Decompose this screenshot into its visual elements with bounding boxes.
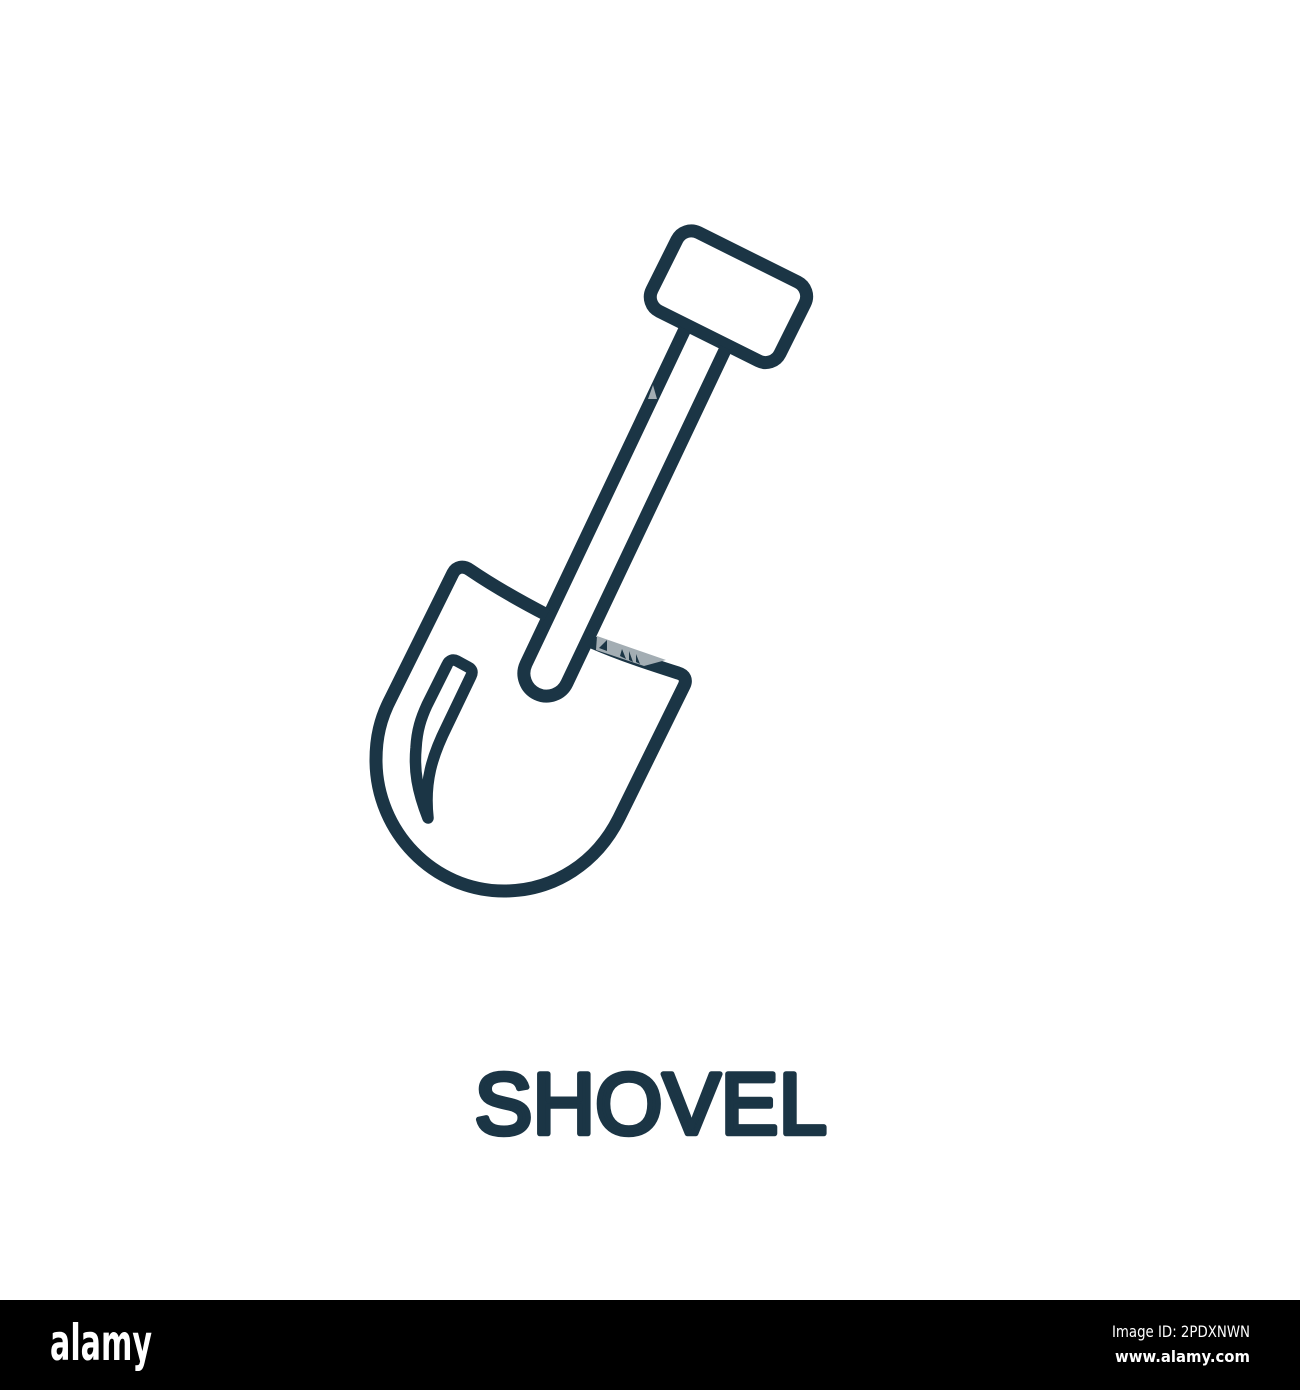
alamy logo: alamy (50, 1314, 152, 1372)
blade highlight (415, 660, 472, 818)
watermark on blade edge (596, 636, 666, 666)
watermark on handle (648, 385, 657, 399)
title: SHOVEL (475, 1056, 827, 1152)
shovel grip (645, 225, 812, 368)
shovel handle (524, 329, 726, 696)
image id: Image ID: 2PDXNWN (1112, 1322, 1250, 1341)
shovel blade (376, 567, 685, 891)
footer bar (0, 1300, 1300, 1390)
icon: shovel (376, 225, 812, 891)
website: www.alamy.com (1115, 1347, 1250, 1366)
